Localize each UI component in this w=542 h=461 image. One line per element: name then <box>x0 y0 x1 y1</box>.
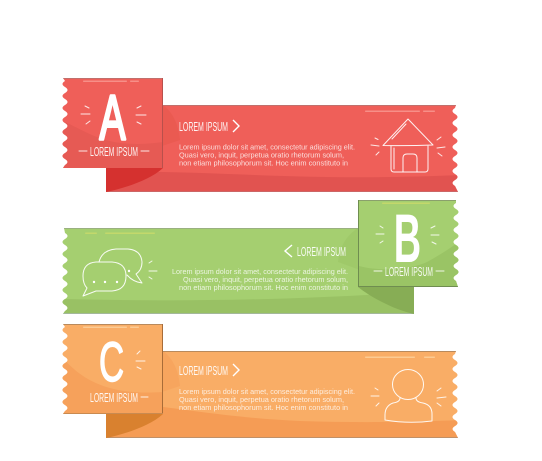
sparkle ticks A <box>81 106 146 124</box>
orange square tag C <box>60 324 165 414</box>
orange ribbon body text: Quasi vero, inquit, perpetua oratio rhetorum solum, <box>179 395 344 404</box>
icon: chat bubbles <box>83 249 157 296</box>
letter B: B <box>394 200 421 277</box>
sparkle ticks C <box>136 351 145 369</box>
orange ribbon body text: Lorem ipsum dolor sit amet, consectetur adipiscing elit. <box>179 387 355 396</box>
tag label B: LOREM IPSUM <box>385 264 433 279</box>
panel: green ribbon B <box>60 200 462 315</box>
red ribbon band <box>106 105 462 192</box>
red ribbon title: LOREM IPSUM <box>179 119 228 134</box>
green ribbon title: LOREM IPSUM <box>297 244 346 259</box>
panel: red ribbon A <box>60 78 462 192</box>
green ribbon band <box>60 228 415 315</box>
red ribbon body text: Quasi vero, inquit, perpetua oratio rhetorum solum, <box>179 150 344 160</box>
green ribbon body text <box>172 267 348 292</box>
orange ribbon title <box>179 363 239 378</box>
green fold <box>358 287 414 314</box>
orange ribbon band <box>106 351 462 438</box>
green ribbon body text: Lorem ipsum dolor sit amet, consectetur adipiscing elit. <box>172 267 348 276</box>
green ribbon body text: Quasi vero, inquit, perpetua oratio rhetorum solum, <box>183 275 348 284</box>
letter A: A <box>99 84 126 153</box>
orange ribbon body text <box>179 387 355 412</box>
green ribbon body text: non etiam philosophorum sit. Hoc enim constituto in <box>179 283 348 292</box>
orange fold <box>106 414 163 438</box>
icon: house <box>371 119 445 172</box>
red ribbon body text <box>179 142 355 168</box>
orange ribbon title: LOREM IPSUM <box>179 363 228 378</box>
orange ribbon body text: non etiam philosophorum sit. Hoc enim constituto in <box>179 403 348 412</box>
red fold <box>106 168 163 192</box>
red ribbon body text: non etiam philosophorum sit. Hoc enim constituto in <box>179 158 348 168</box>
red ribbon body text: Lorem ipsum dolor sit amet, consectetur adipiscing elit. <box>179 142 355 152</box>
tag label C: LOREM IPSUM <box>90 390 138 405</box>
letter C: C <box>99 331 124 393</box>
panel: orange ribbon C <box>60 324 462 438</box>
tag label A: LOREM IPSUM <box>90 144 138 159</box>
icon: person <box>371 370 446 422</box>
sparkle ticks B <box>376 226 439 244</box>
red square tag A <box>60 78 165 168</box>
red ribbon title <box>179 119 239 134</box>
green square tag B <box>356 200 462 288</box>
green ribbon title <box>285 244 346 259</box>
